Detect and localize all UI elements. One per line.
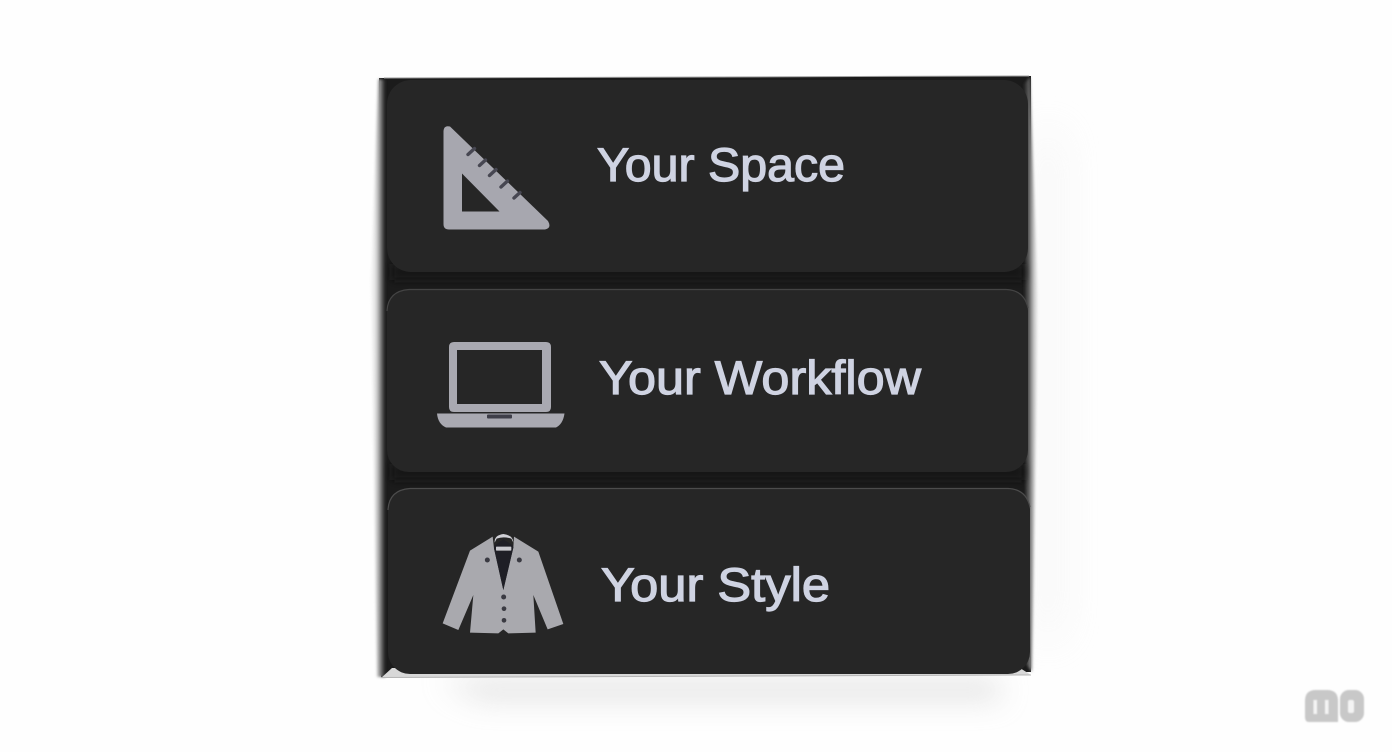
icon: set square [444,126,549,230]
card shadows between cards [392,264,1024,480]
card: Your Workflow [387,289,1028,472]
watermark logo [1305,690,1364,722]
label: Your Space: Your Space [597,138,845,191]
card: Your Space [387,80,1028,272]
icon: jacket [443,534,563,633]
tray [371,76,1038,678]
icon: laptop [437,342,564,428]
label: Your Style: Your Style [601,558,830,611]
card: Your Style [388,488,1030,674]
label: Your Workflow: Your Workflow [599,351,922,404]
tray drop shadow [440,130,1060,700]
